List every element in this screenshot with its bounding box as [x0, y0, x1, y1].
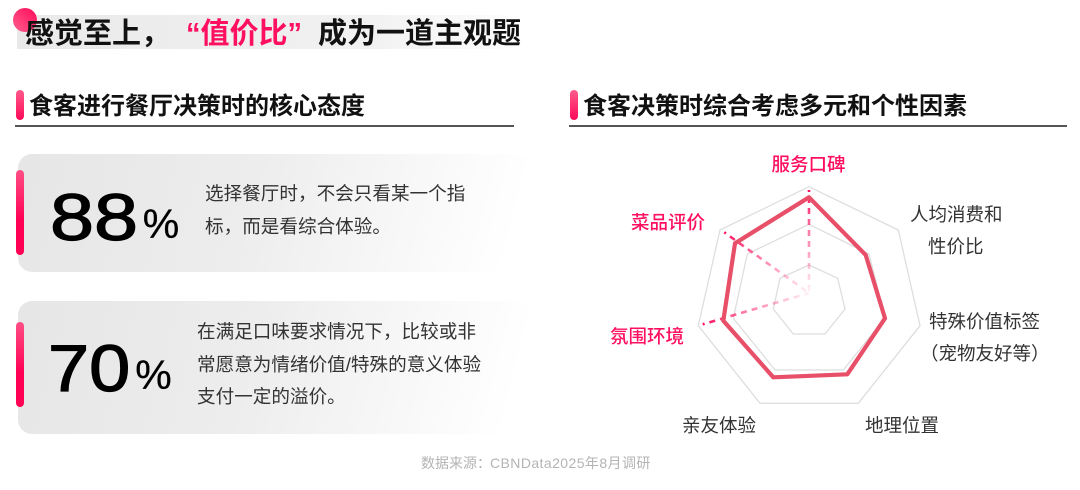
- radar labels: [610, 154, 1050, 436]
- source note: [421, 455, 651, 471]
- heading marker: [570, 90, 578, 120]
- percent sign: %: [135, 352, 172, 398]
- radar labels: 亲友体验: [682, 415, 756, 436]
- panel: 88% card: [16, 154, 465, 272]
- source note: CBNData2025年8月调研: [490, 455, 651, 471]
- title background band: [17, 15, 508, 49]
- radar labels: 特殊价值标签: [929, 311, 1040, 332]
- heading text: 食客进行餐厅决策时的核心态度: [29, 92, 365, 120]
- heading rule: [15, 125, 514, 127]
- radar labels: （宠物友好等）: [920, 343, 1050, 364]
- description: [197, 321, 481, 407]
- source note: 数据来源：: [421, 455, 491, 471]
- data polygon: [723, 197, 885, 377]
- radar labels: 地理位置: [865, 415, 939, 436]
- radar labels: 氛围环境: [610, 326, 684, 347]
- radar labels: 性价比: [928, 236, 984, 257]
- panel: decision factors heading: [569, 90, 1067, 127]
- radar chart: [610, 154, 1050, 436]
- panel: core attitudes heading: [15, 90, 514, 127]
- figure 88: 88: [50, 180, 138, 254]
- description: 支付一定的溢价。: [197, 386, 346, 407]
- heading marker: [16, 90, 24, 120]
- panel: 70% card: [16, 301, 481, 434]
- radar labels: 人均消费和: [910, 204, 1003, 225]
- highlighted axes: [703, 190, 809, 324]
- figure 70: 70: [48, 330, 130, 404]
- accent bar: [16, 322, 24, 407]
- radar grid: [698, 187, 920, 403]
- radar labels: 服务口碑: [772, 154, 846, 175]
- description: 常愿意为情绪价值/特殊的意义体验: [197, 354, 481, 374]
- title decorative circle: [13, 8, 37, 32]
- heading text: 食客决策时综合考虑多元和个性因素: [583, 92, 967, 120]
- description: 在满足口味要求情况下，比较或非: [197, 321, 476, 342]
- card background: [18, 301, 530, 434]
- title: [13, 8, 521, 50]
- description: 标，而是看综合体验。: [205, 216, 391, 236]
- percent sign: %: [143, 201, 179, 247]
- radar labels: 菜品评价: [631, 212, 706, 233]
- heading rule: [569, 125, 1067, 127]
- accent bar: [16, 170, 24, 255]
- title text: 感觉至上， “值价比” 成为一道主观题: [25, 18, 521, 50]
- description: 选择餐厅时，不会只看某一个指: [205, 183, 465, 204]
- card background: [18, 154, 530, 272]
- description: [205, 183, 465, 236]
